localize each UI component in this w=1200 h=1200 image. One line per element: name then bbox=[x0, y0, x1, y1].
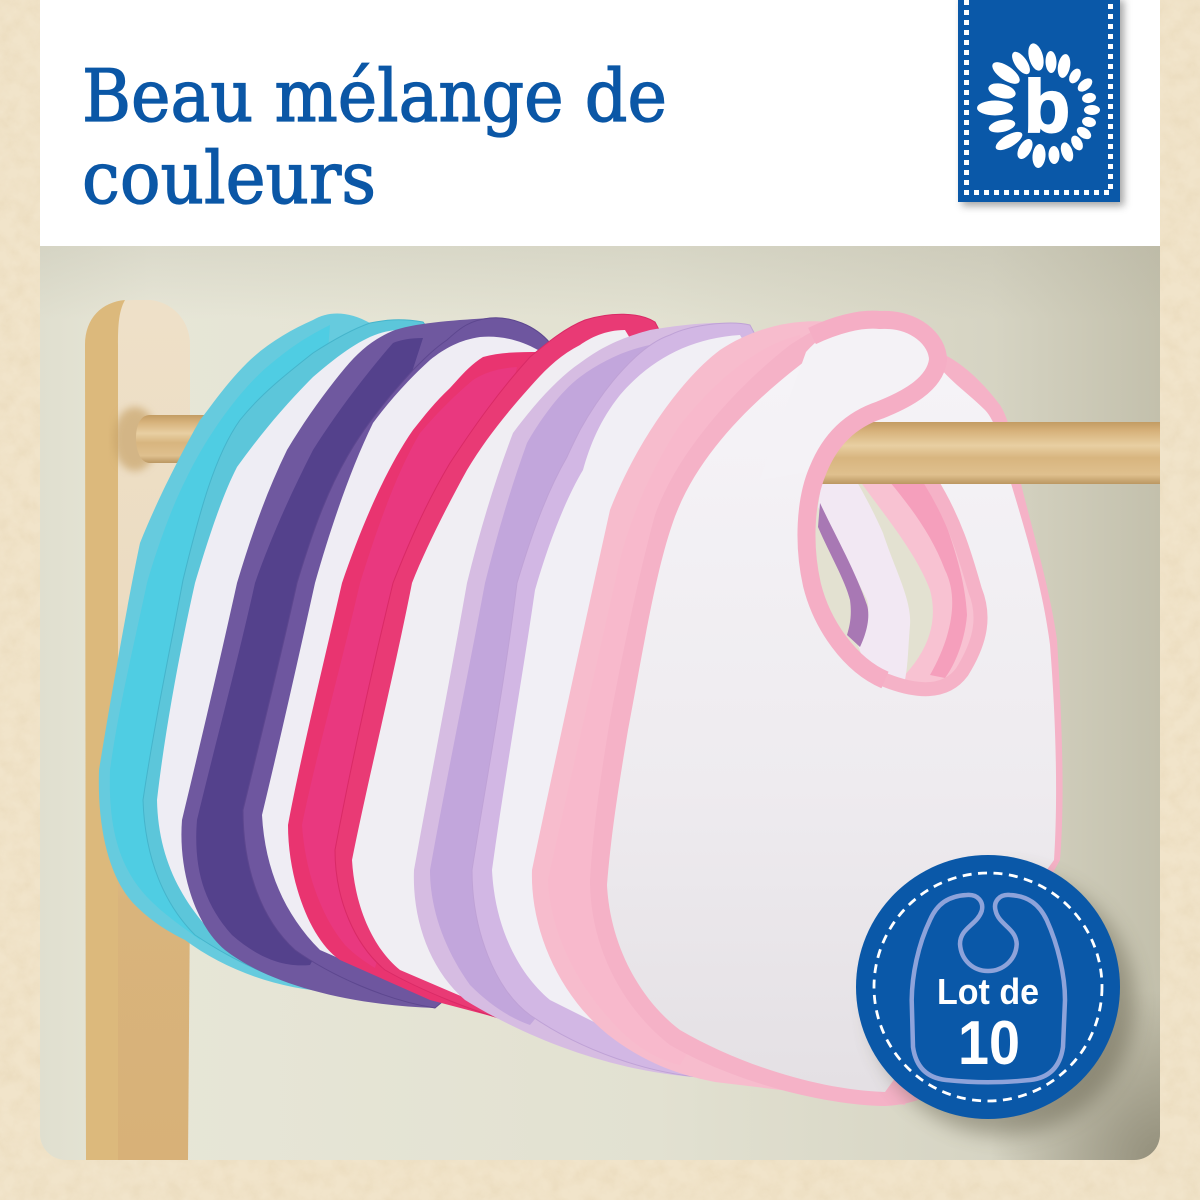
logo letter: b bbox=[1024, 65, 1070, 148]
title bbox=[82, 54, 667, 220]
neck binding, tab and left arm bbox=[806, 320, 938, 680]
logo tag bbox=[958, 0, 1124, 206]
photo panel bbox=[40, 246, 1160, 1160]
title: Beau mélange de bbox=[82, 54, 667, 138]
bib: turquoise bbox=[98, 314, 425, 990]
title: couleurs bbox=[82, 136, 376, 220]
header panel bbox=[40, 0, 1160, 246]
wooden rod, left end bbox=[136, 415, 204, 463]
icon: bib outline bbox=[912, 895, 1065, 1082]
bib: magenta bbox=[288, 314, 659, 1018]
wall shadow near badge bbox=[871, 871, 1135, 1135]
white bib seen through opening bbox=[818, 470, 910, 680]
badge: lot de 10 bbox=[856, 855, 1120, 1119]
bib: front pink, body bbox=[590, 312, 1063, 1106]
badge text: Lot de bbox=[937, 971, 1039, 1012]
badge text bbox=[937, 971, 1039, 1078]
wooden post bbox=[85, 300, 190, 1160]
pink bibs seen through opening bbox=[862, 484, 974, 682]
neck binding, right arm bbox=[885, 480, 981, 689]
bib: purple bbox=[181, 317, 549, 1008]
bib tab over rod bbox=[802, 328, 929, 466]
badge text: 10 bbox=[958, 1009, 1020, 1078]
icon: flower petals bbox=[977, 42, 1100, 169]
purple bib seen through opening bbox=[818, 503, 868, 647]
bib: light pink, back layer bbox=[532, 321, 906, 1105]
wall background bbox=[40, 246, 1160, 1160]
wooden rod, right section bbox=[810, 422, 1160, 484]
bib: lilac bbox=[414, 322, 754, 1077]
neck opening bbox=[816, 484, 974, 682]
